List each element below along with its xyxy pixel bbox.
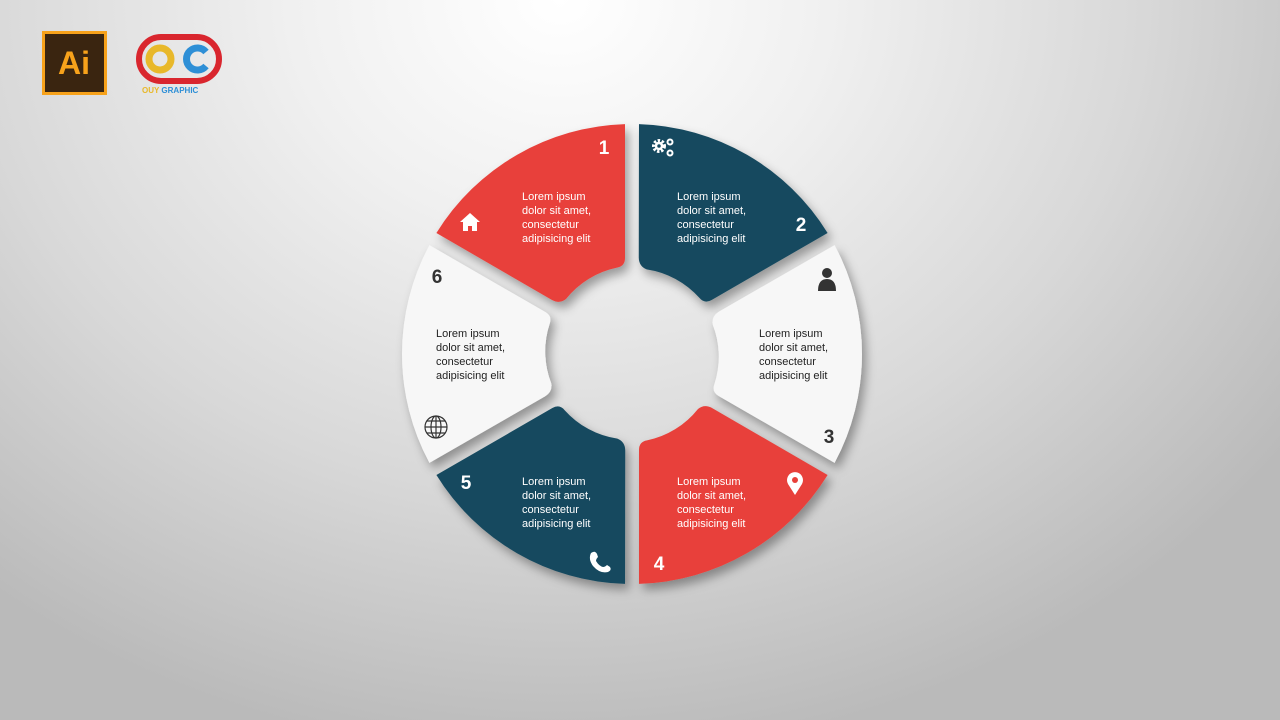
text: segment 5: dolor sit amet, <box>522 490 591 502</box>
icon: phone <box>590 552 611 572</box>
icon: gears <box>654 140 672 156</box>
icon: globe <box>425 416 447 438</box>
segment 4 <box>639 406 828 584</box>
icon: home <box>460 213 480 231</box>
text: segment 2: Lorem ipsum <box>677 191 741 203</box>
text: segment 6: dolor sit amet, <box>436 342 505 354</box>
segment 3 <box>681 211 929 463</box>
logo: Adobe Illustrator <box>42 31 107 95</box>
text: segment 6: Lorem ipsum <box>436 328 500 340</box>
text: segment 6: adipisicing elit <box>436 370 504 382</box>
text: segment 6: consectetur <box>436 356 493 368</box>
text: segment 4: dolor sit amet, <box>677 490 746 502</box>
text: segment 1: adipisicing elit <box>522 233 590 245</box>
segment 1 <box>436 124 625 302</box>
text: segment 3: Lorem ipsum <box>759 328 823 340</box>
numbers: 1 <box>599 138 610 159</box>
segment 6 <box>335 245 583 497</box>
numbers <box>432 138 834 575</box>
text: segment 4: consectetur <box>677 504 734 516</box>
logo: OUY Graphic <box>139 37 219 95</box>
text: segment 2: dolor sit amet, <box>677 205 746 217</box>
segment 2 <box>579 70 828 322</box>
numbers: 2 <box>796 215 806 236</box>
numbers: 5 <box>461 473 472 494</box>
icon: location pin <box>787 472 803 495</box>
numbers: 6 <box>432 267 442 288</box>
text: segment 1: dolor sit amet, <box>522 205 591 217</box>
text: segment 5: adipisicing elit <box>522 518 590 530</box>
text: segment 1: consectetur <box>522 219 579 231</box>
text: segment 4: adipisicing elit <box>677 518 745 530</box>
text: segment 5: consectetur <box>522 504 579 516</box>
logo: OUY Graphic: OUY GRAPHIC <box>142 86 199 95</box>
text: segment 2: consectetur <box>677 219 734 231</box>
text: segment 2: adipisicing elit <box>677 233 745 245</box>
numbers: 4 <box>654 554 665 575</box>
icon: person <box>818 268 836 291</box>
text: segment 4: Lorem ipsum <box>677 476 741 488</box>
text: segment 3: consectetur <box>759 356 816 368</box>
text: segment 1: Lorem ipsum <box>522 191 586 203</box>
ring chart <box>335 70 929 638</box>
segment 5 <box>436 386 685 638</box>
text: segment 3: dolor sit amet, <box>759 342 828 354</box>
logo: Adobe Illustrator: Ai <box>58 45 90 81</box>
text: segment 3: adipisicing elit <box>759 370 827 382</box>
text: segment 5: Lorem ipsum <box>522 476 586 488</box>
numbers: 3 <box>824 427 834 448</box>
